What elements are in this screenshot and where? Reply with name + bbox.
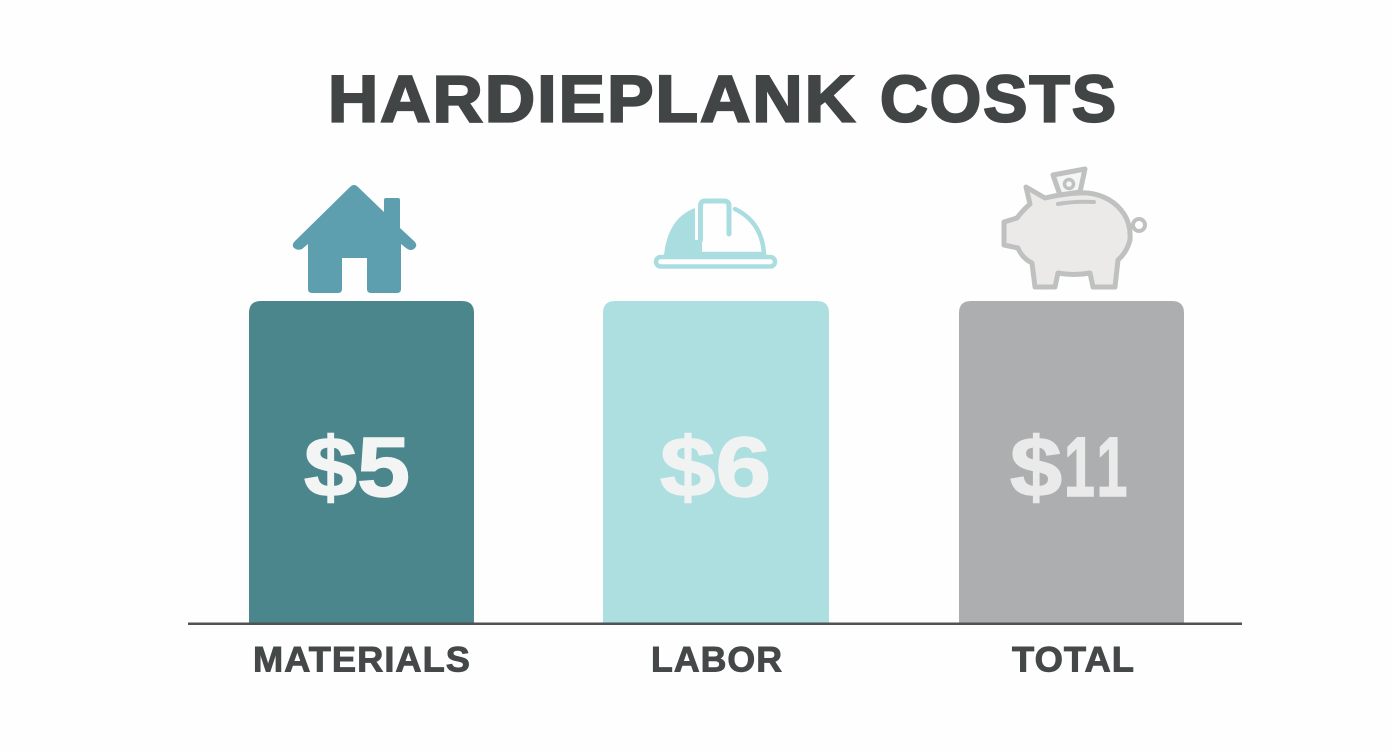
icon: piggy bank bbox=[1004, 169, 1145, 287]
baseline axis bbox=[188, 622, 1242, 625]
panel: total column bbox=[959, 169, 1184, 680]
bar: labor bbox=[603, 301, 829, 623]
bar: total bbox=[959, 301, 1184, 623]
label: total: TOTAL bbox=[1012, 640, 1135, 680]
icon: house bbox=[293, 185, 416, 293]
title: COSTS bbox=[880, 62, 1118, 136]
panel: labor column bbox=[603, 201, 829, 680]
icon: hard hat bbox=[656, 201, 775, 266]
bar: materials bbox=[249, 301, 474, 623]
value: $11: 11 bbox=[1064, 420, 1132, 514]
value: $6: $6 bbox=[660, 420, 771, 514]
value: $11: $ bbox=[1010, 420, 1062, 514]
label: labor: LABOR bbox=[651, 640, 783, 680]
value: $5: $5 bbox=[304, 420, 410, 514]
title: HARDIEPLANK bbox=[328, 62, 857, 136]
panel: materials column bbox=[249, 185, 474, 680]
label: materials: MATERIALS bbox=[253, 640, 471, 680]
